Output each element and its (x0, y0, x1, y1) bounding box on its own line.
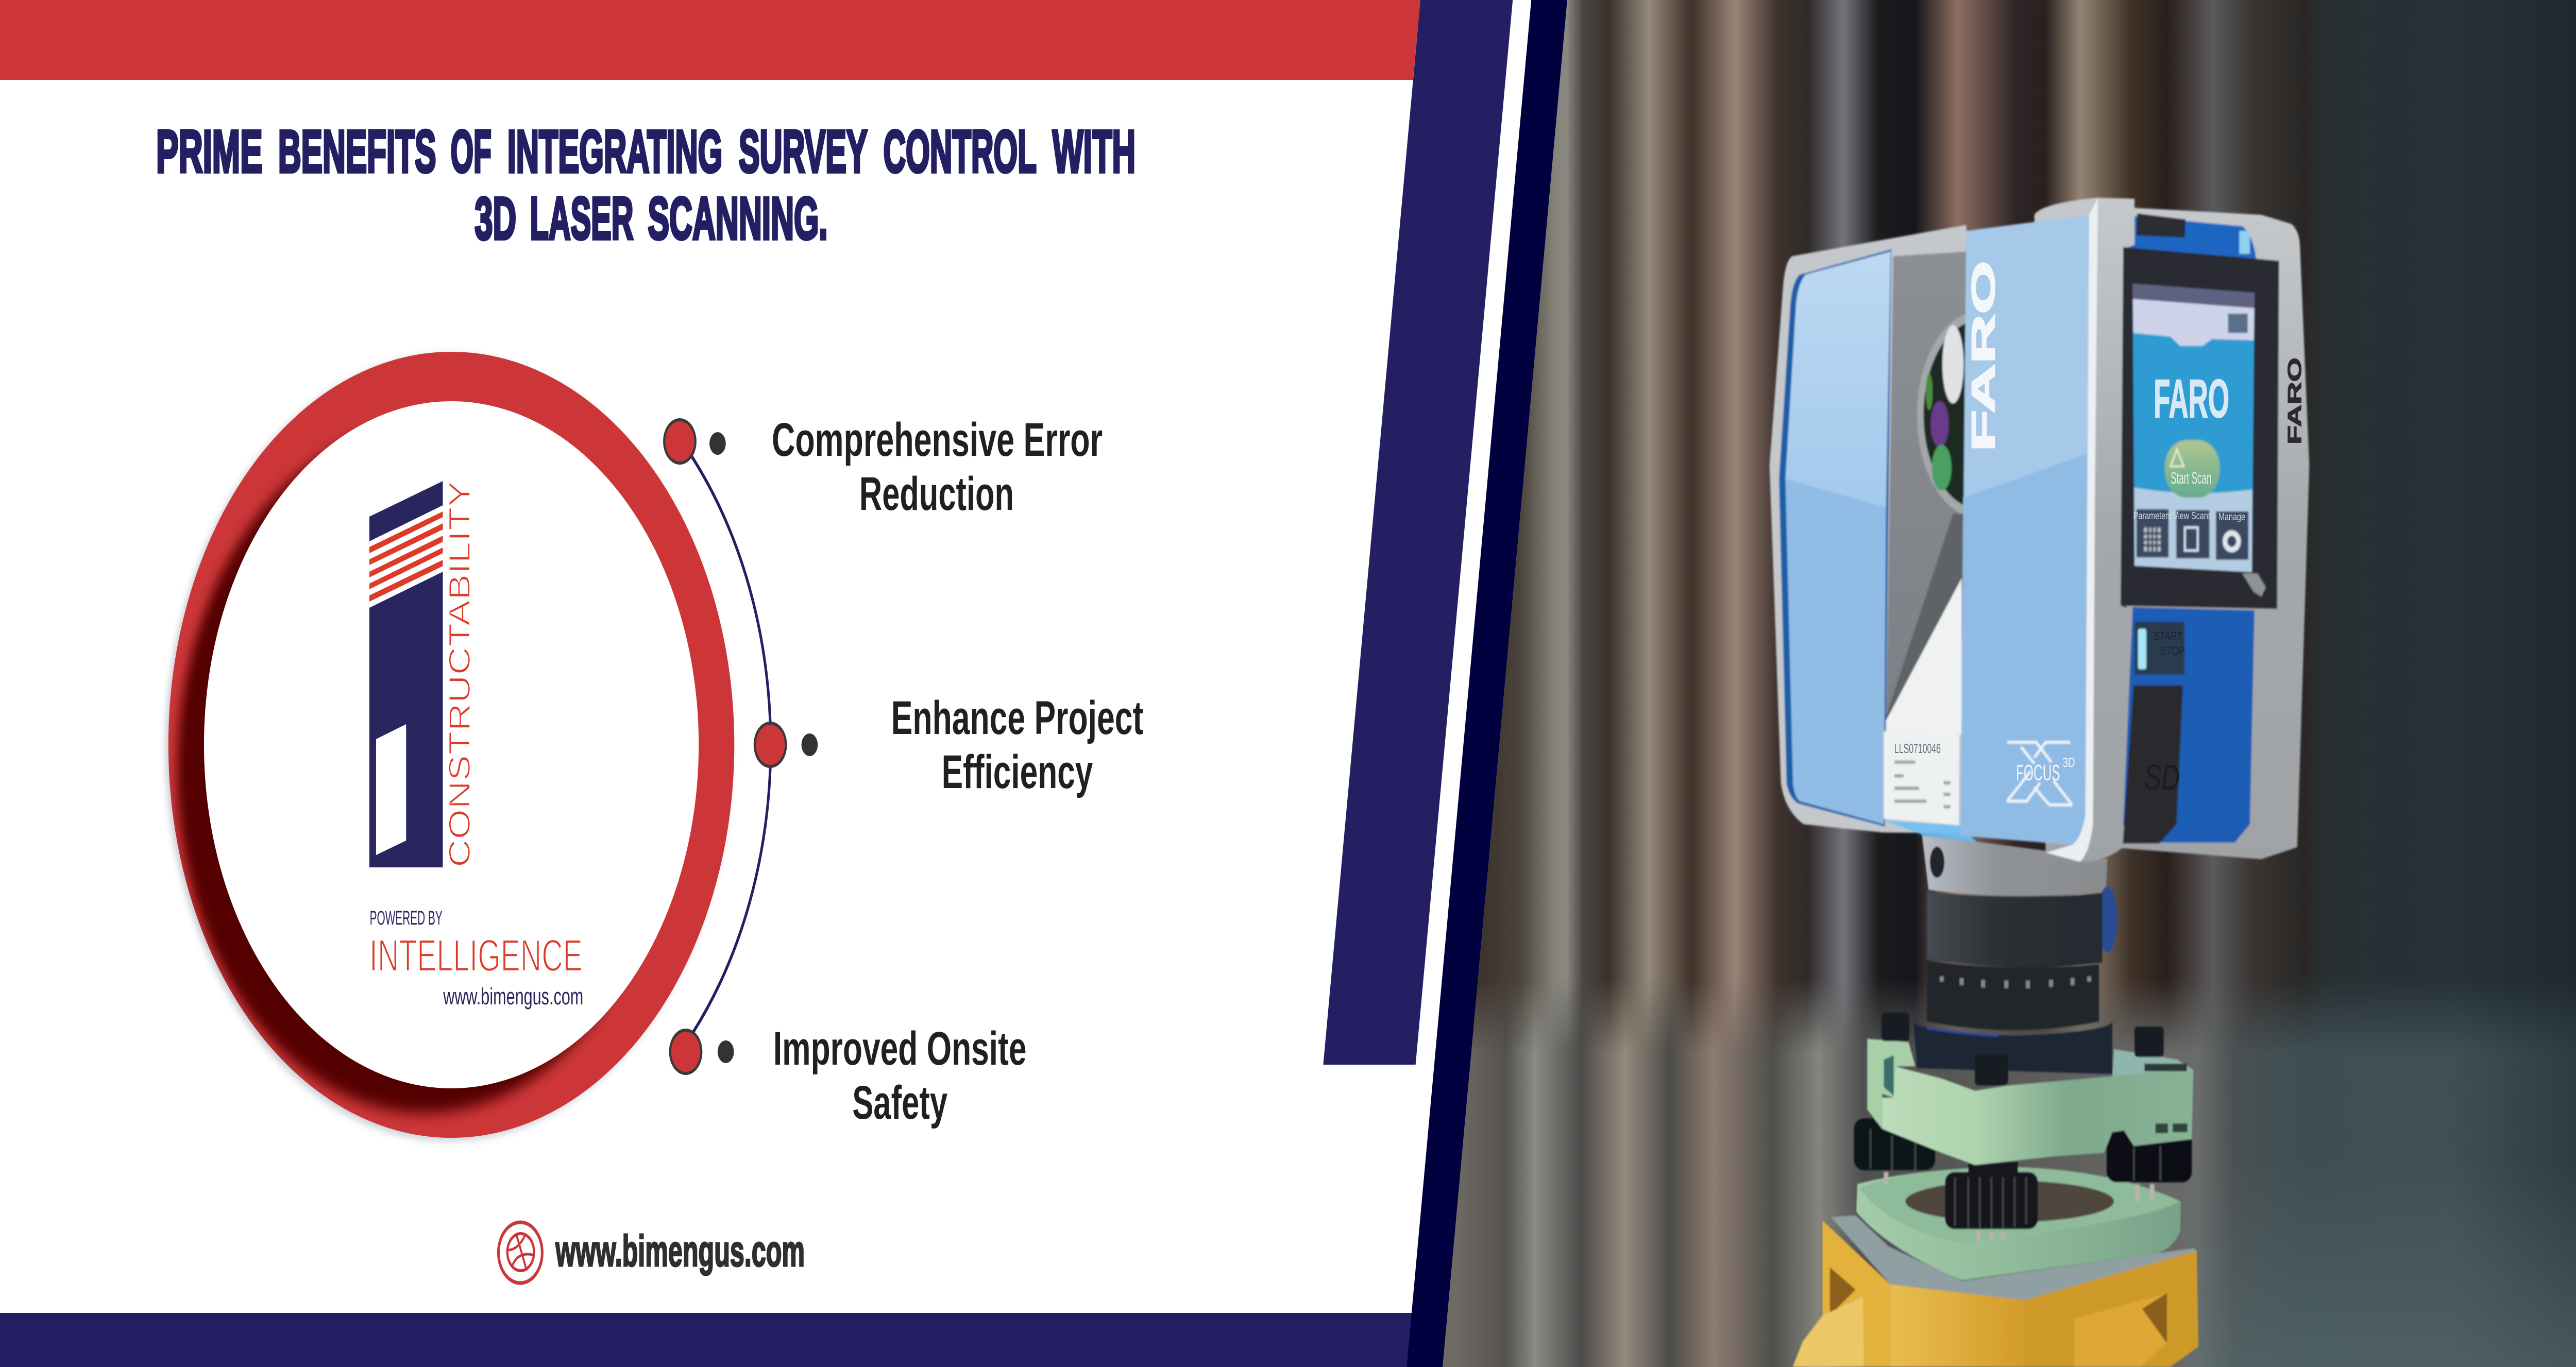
graduated ring (1927, 961, 2099, 1030)
left blue edge (1779, 249, 1891, 827)
screen label: view scans: View Scans (2173, 510, 2212, 522)
photo background: reflective glass floor (1409, 979, 2576, 1367)
powered by: POWERED BY (370, 908, 443, 929)
dark navy slanted stripe (1406, 0, 1567, 1367)
slot plate (2144, 1064, 2187, 1071)
upper green body: back pieces (1867, 1039, 2193, 1129)
bottom navy bar (0, 1313, 1412, 1367)
serial label (1884, 731, 1959, 825)
benefit 3: Improved Onsite (773, 1021, 1027, 1075)
top LED (2240, 231, 2250, 254)
benefit 2 (891, 691, 1143, 798)
ring dark crescent shadow (177, 426, 672, 1113)
white panel edge (2046, 198, 2098, 862)
FARO logo on side: FARO (2284, 357, 2306, 445)
title: PRIME (156, 119, 263, 185)
navy slanted band (1323, 0, 1513, 1065)
black cylinder (1927, 892, 2103, 967)
silver plate (1831, 1215, 2197, 1300)
recess shaded diagonal (1886, 514, 1966, 721)
red ring (168, 352, 734, 1138)
left silver housing (1770, 225, 1985, 833)
start scan label: Start Scan (2171, 469, 2211, 487)
benefit 2: Efficiency (942, 745, 1093, 798)
scanner recess (1886, 251, 1966, 732)
touch screen (2133, 284, 2255, 572)
screen label: parameters: Parameters (2133, 510, 2172, 522)
SD card door (2123, 686, 2183, 844)
neck (1922, 834, 2107, 896)
level slots (2156, 1123, 2188, 1133)
white disc (204, 401, 699, 1088)
screen stylus tab (2242, 574, 2266, 596)
node 1 (664, 420, 726, 463)
black top button (2137, 213, 2185, 238)
benefit 1: Comprehensive Error (772, 413, 1103, 466)
FARO logo on screen: FARO (2154, 369, 2229, 429)
benefit 3 (773, 1021, 1027, 1129)
Focus X logo (2007, 742, 2072, 805)
lower green plate (1856, 1167, 2181, 1280)
Focus label: FOCUS (2016, 760, 2060, 785)
stop text: STOP (2160, 644, 2184, 658)
FARO logo on panel: FARO (1965, 261, 2002, 452)
ring with logo (165, 352, 734, 1141)
levelling wheels (1854, 1118, 2192, 1241)
pins (1882, 1013, 2164, 1085)
title: SCANNING. (648, 186, 828, 252)
3D label: 3D (2063, 755, 2075, 770)
serial label text: LLS0710046 (1894, 741, 1941, 756)
constructability wordmark: CONSTRUCTABILITY (443, 481, 476, 867)
title: WITH (1053, 119, 1136, 185)
centre blue panel (1960, 215, 2089, 845)
benefit 2: Enhance Project (891, 691, 1143, 744)
left blue panel upper (1785, 251, 1891, 508)
start stop button (2134, 622, 2184, 675)
lower blue body (2123, 607, 2255, 843)
tripod mount and tribrach (1793, 834, 2198, 1367)
base ring (1913, 1021, 2112, 1074)
start stop text: START (2154, 629, 2182, 643)
title: 3D (474, 186, 516, 252)
SD door mark: SD (2144, 757, 2180, 797)
blue top cover (2123, 216, 2257, 263)
centre silver band (2035, 198, 2134, 862)
right silver housing (2121, 208, 2309, 859)
title: LASER (530, 186, 633, 252)
constructability building logo (369, 481, 443, 867)
left blue panel lower (1785, 479, 1886, 824)
yellow tripod head (1793, 1220, 2198, 1367)
website url: www.bimengus.com (555, 1226, 805, 1275)
icon: dribbble ball (498, 1222, 542, 1283)
upper green body: main (1882, 1066, 2193, 1165)
title: CONTROL (884, 119, 1037, 185)
benefit 3: Safety (852, 1075, 948, 1129)
lens (1923, 320, 2036, 509)
title: INTEGRATING (507, 119, 722, 185)
panel: white content background (0, 0, 1557, 1367)
node 3 (670, 1030, 734, 1073)
blue LED glow (1884, 821, 1977, 843)
benefit 1: Reduction (859, 467, 1014, 520)
intelligence wordmark: INTELLIGENCE (369, 931, 583, 981)
screen bezel (2121, 247, 2279, 609)
neck screw hole (1930, 847, 1944, 878)
ring outer soft shadow (165, 355, 732, 1141)
top red bar (0, 0, 1420, 80)
timeline arc (692, 457, 771, 1032)
panel: photo of the laser scanner (1409, 0, 2576, 1367)
title (156, 119, 1136, 252)
node 2 (755, 723, 818, 766)
photo background: blurred vertical stripes (1409, 0, 2576, 1082)
logo url: www.bimengus.com (443, 984, 583, 1010)
title: OF (451, 119, 492, 185)
title: SURVEY (739, 119, 868, 185)
benefit 1 (772, 413, 1103, 520)
lens surround (1917, 312, 2042, 518)
floor glow (2189, 1220, 2576, 1367)
title: BENEFITS (278, 119, 436, 185)
blue knob (2097, 886, 2117, 952)
screen label: manage: Manage (2218, 511, 2245, 523)
recess white wedge (1886, 578, 1962, 734)
FARO Focus 3D scanner body (1770, 198, 2309, 862)
